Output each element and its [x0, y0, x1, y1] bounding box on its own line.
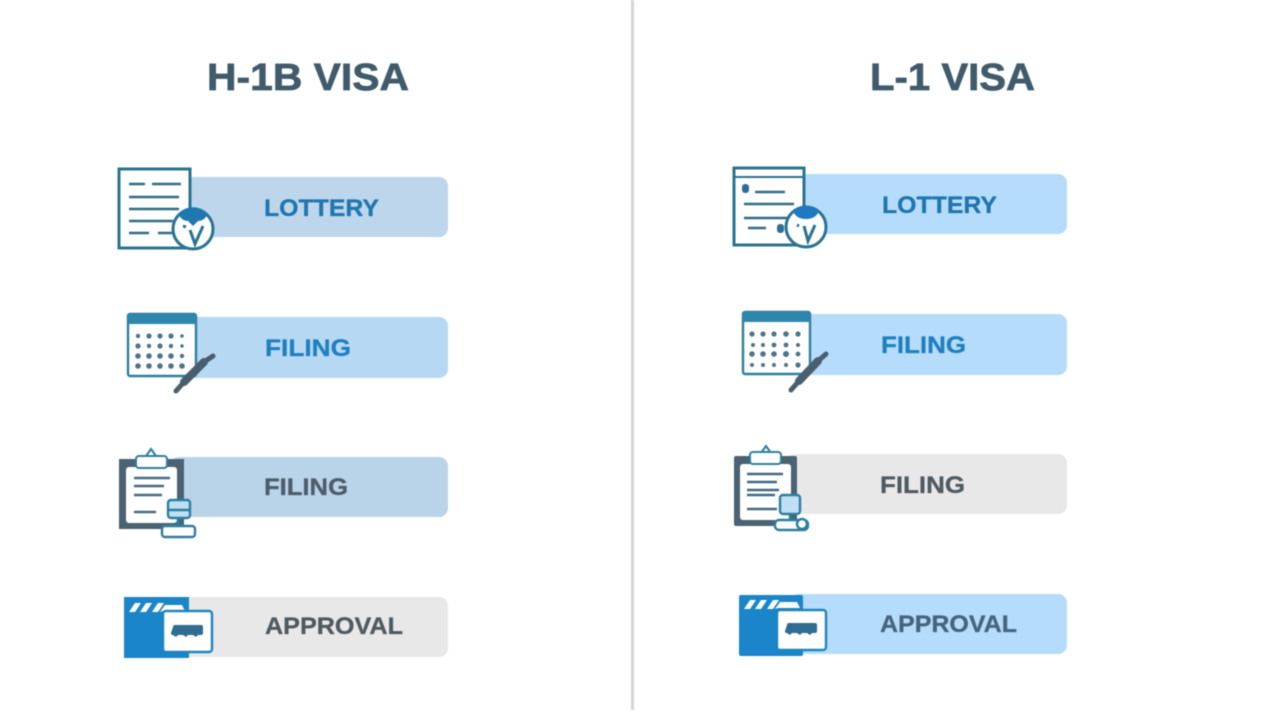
panel: H-1B visa	[119, 57, 448, 658]
icon: clipboard with reviewer	[734, 446, 808, 530]
heading: H-1B VISA: H-1B VISA	[207, 57, 409, 99]
label: filing: FILING	[265, 335, 351, 362]
step: approval	[739, 594, 1067, 656]
label: approval: APPROVAL	[265, 613, 403, 640]
heading: L-1 VISA: L-1 VISA	[870, 57, 1035, 99]
icon: calendar and pen	[743, 312, 826, 390]
icon: document with badge	[119, 169, 213, 249]
step: filing (calendar)	[128, 314, 448, 391]
icon: clipboard with reviewer	[119, 449, 195, 537]
panel: L-1 visa	[734, 57, 1067, 656]
icon: calendar and pen	[128, 314, 213, 391]
step: filing (calendar)	[743, 312, 1067, 390]
step: filing (clipboard)	[734, 446, 1067, 530]
step: lottery	[119, 169, 448, 249]
step: approval	[124, 597, 448, 658]
icon: folder with card	[124, 597, 212, 658]
label: filing: FILING	[881, 332, 966, 359]
label: lottery: LOTTERY	[264, 195, 379, 222]
label: filing: FILING	[880, 472, 965, 499]
icon: folder with card	[739, 595, 826, 656]
step: lottery	[734, 168, 1067, 247]
label: approval: APPROVAL	[880, 611, 1017, 638]
label: filing: FILING	[264, 474, 348, 501]
label: lottery: LOTTERY	[882, 192, 997, 219]
icon: document with badge	[734, 168, 826, 247]
step: filing (clipboard)	[119, 449, 448, 537]
